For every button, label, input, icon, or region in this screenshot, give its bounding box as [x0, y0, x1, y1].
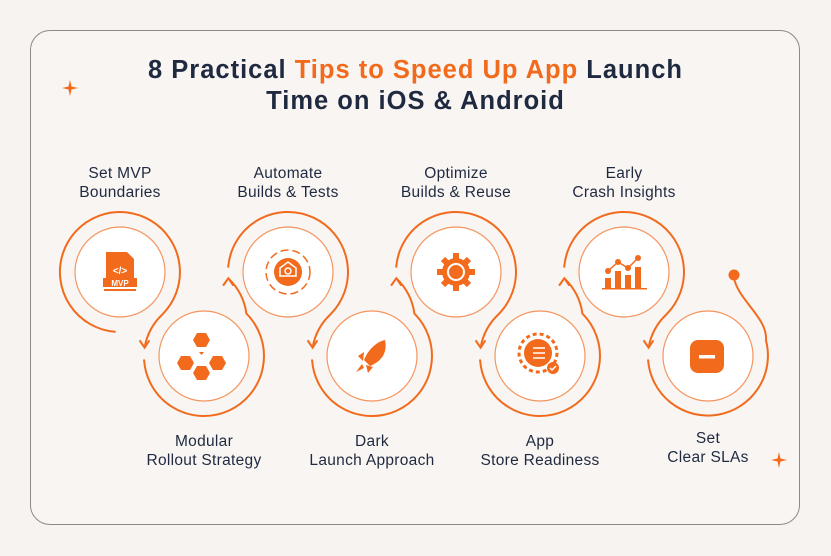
- text: Modular: [175, 433, 233, 450]
- icon: MVP doc: MVP: [111, 279, 129, 288]
- snake path: [60, 212, 768, 416]
- title: [148, 56, 683, 115]
- icon: app store readiness: [519, 334, 559, 374]
- text: Builds & Reuse: [401, 184, 511, 201]
- title: 8 Practical Tips to Speed Up App Launch: [148, 56, 683, 84]
- text: Dark: [355, 433, 389, 450]
- text: Builds & Tests: [237, 184, 339, 201]
- text: Crash Insights: [572, 184, 676, 201]
- sparkles: [62, 80, 787, 468]
- text: App: [526, 433, 554, 450]
- icon: gear: [437, 253, 475, 291]
- text: Store Readiness: [480, 452, 600, 469]
- labels: [79, 165, 161, 201]
- icon: MVP doc: </>: [113, 266, 127, 277]
- text: Rollout Strategy: [146, 452, 262, 469]
- icon: SLA: [690, 340, 724, 373]
- title: Time on iOS & Android: [266, 87, 565, 115]
- text: Early: [606, 165, 642, 182]
- inner circles: [75, 227, 753, 401]
- icon: hexagons: [177, 333, 226, 380]
- text: Optimize: [424, 165, 488, 182]
- labels: Boundaries: [79, 184, 161, 201]
- text: Set: [696, 430, 720, 447]
- text: Clear SLAs: [667, 449, 749, 466]
- labels: Set MVP: [88, 165, 152, 182]
- icon: chart: [602, 255, 647, 290]
- text: Automate: [254, 165, 322, 182]
- text: Launch Approach: [309, 452, 435, 469]
- icon: MVP doc: [103, 252, 137, 291]
- icon: automate: [266, 250, 310, 294]
- icon: rocket: [356, 340, 386, 373]
